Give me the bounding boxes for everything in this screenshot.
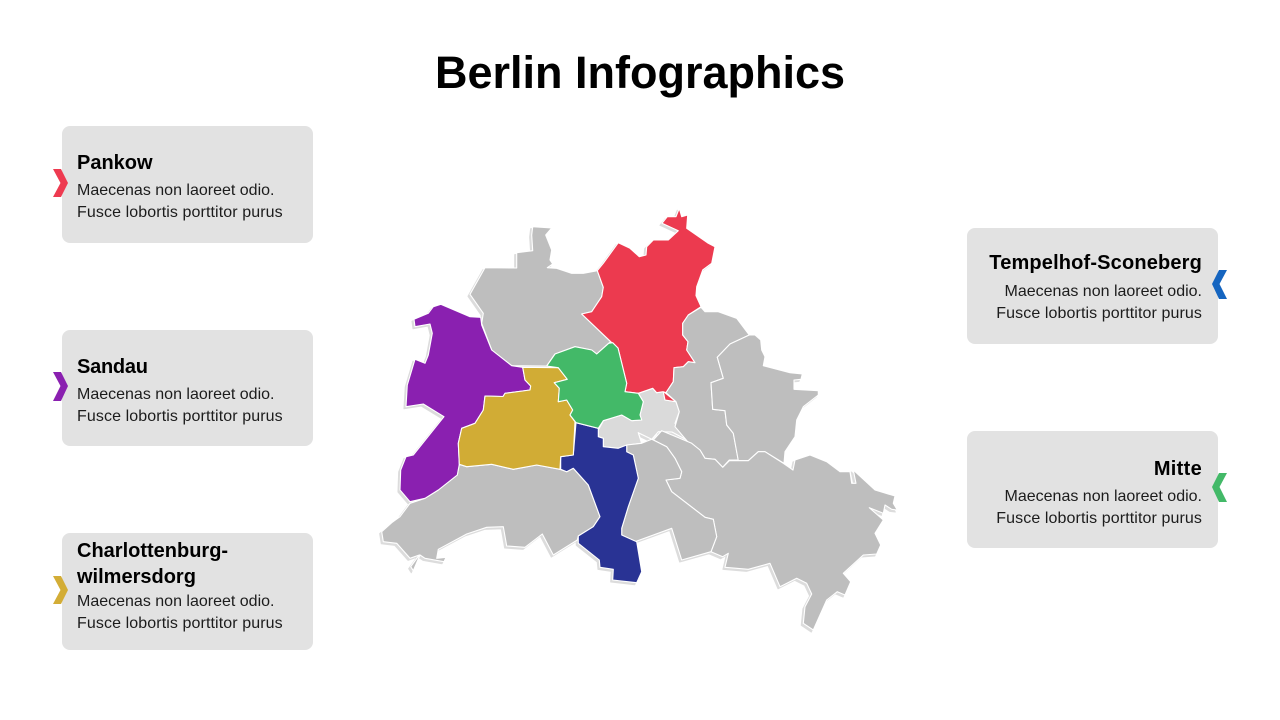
title: Berlin Infographics [435, 47, 845, 98]
heading: Mitte: Mitte [1154, 458, 1202, 480]
icon: Charlottenburg chevron [53, 576, 68, 604]
district: Tempelhof-Schoeneberg [561, 423, 642, 583]
district: Marzahn-Hellersdorf [711, 335, 818, 463]
text: Sandau description [77, 386, 283, 425]
district: Charlottenburg-Wilmersdorf [458, 367, 575, 469]
district: Neukoelln [622, 433, 717, 560]
district: Reinickendorf [470, 227, 611, 366]
panel: Pankow [62, 126, 313, 243]
district: Pankow [582, 208, 715, 402]
icon: Tempelhof chevron [1212, 270, 1227, 299]
text: Charlottenburg-wilmersdorg description: Fusce lobortis porttitor purus [77, 615, 283, 632]
text: Sandau description: Fusce lobortis porttitor purus [77, 408, 283, 425]
panel: Tempelhof-Sconeberg [967, 228, 1218, 344]
text: Tempelhof-Sconeberg description: Maecenas non laoreet odio. [1005, 283, 1202, 300]
district: Friedrichshain-Kreuzberg [598, 388, 690, 448]
text: Charlottenburg-wilmersdorg description: Maecenas non laoreet odio. [77, 593, 274, 610]
text: Pankow description: Maecenas non laoreet odio. [77, 182, 274, 199]
heading: Charlottenburg-wilmersdorg: Charlottenburg- [77, 540, 228, 562]
text: Pankow description: Fusce lobortis porttitor purus [77, 204, 283, 221]
district: Lichtenberg [666, 307, 749, 467]
text: Tempelhof-Sconeberg description: Fusce lobortis porttitor purus [996, 305, 1202, 322]
district: Treptow-Koepenick [653, 431, 897, 630]
text: Mitte description [996, 488, 1202, 527]
text: Pankow description [77, 182, 283, 221]
icon: Mitte chevron [1212, 473, 1227, 502]
district: Spandau [400, 304, 531, 502]
district: Mitte [547, 343, 643, 428]
text: Mitte description: Fusce lobortis porttitor purus [996, 510, 1202, 527]
icon: Pankow chevron [53, 169, 68, 197]
text: Sandau description: Maecenas non laoreet odio. [77, 386, 274, 403]
panel: Mitte [967, 431, 1218, 548]
heading: Sandau: Sandau [77, 356, 148, 378]
text: Charlottenburg-wilmersdorg description [77, 593, 283, 632]
heading: Charlottenburg-wilmersdorg: wilmersdorg [77, 566, 196, 588]
heading: Tempelhof-Sconeberg: Tempelhof-Sconeberg [989, 252, 1202, 274]
text: Mitte description: Maecenas non laoreet odio. [1005, 488, 1202, 505]
panel: Charlottenburg-wilmersdorg [62, 533, 313, 650]
heading: Charlottenburg-wilmersdorg [77, 540, 228, 588]
district: Steglitz-Zehlendorf [382, 464, 600, 571]
icon: Sandau chevron [53, 372, 68, 401]
panel: Sandau [62, 330, 313, 446]
heading: Pankow: Pankow [77, 152, 153, 174]
text: Tempelhof-Sconeberg description [996, 283, 1202, 322]
